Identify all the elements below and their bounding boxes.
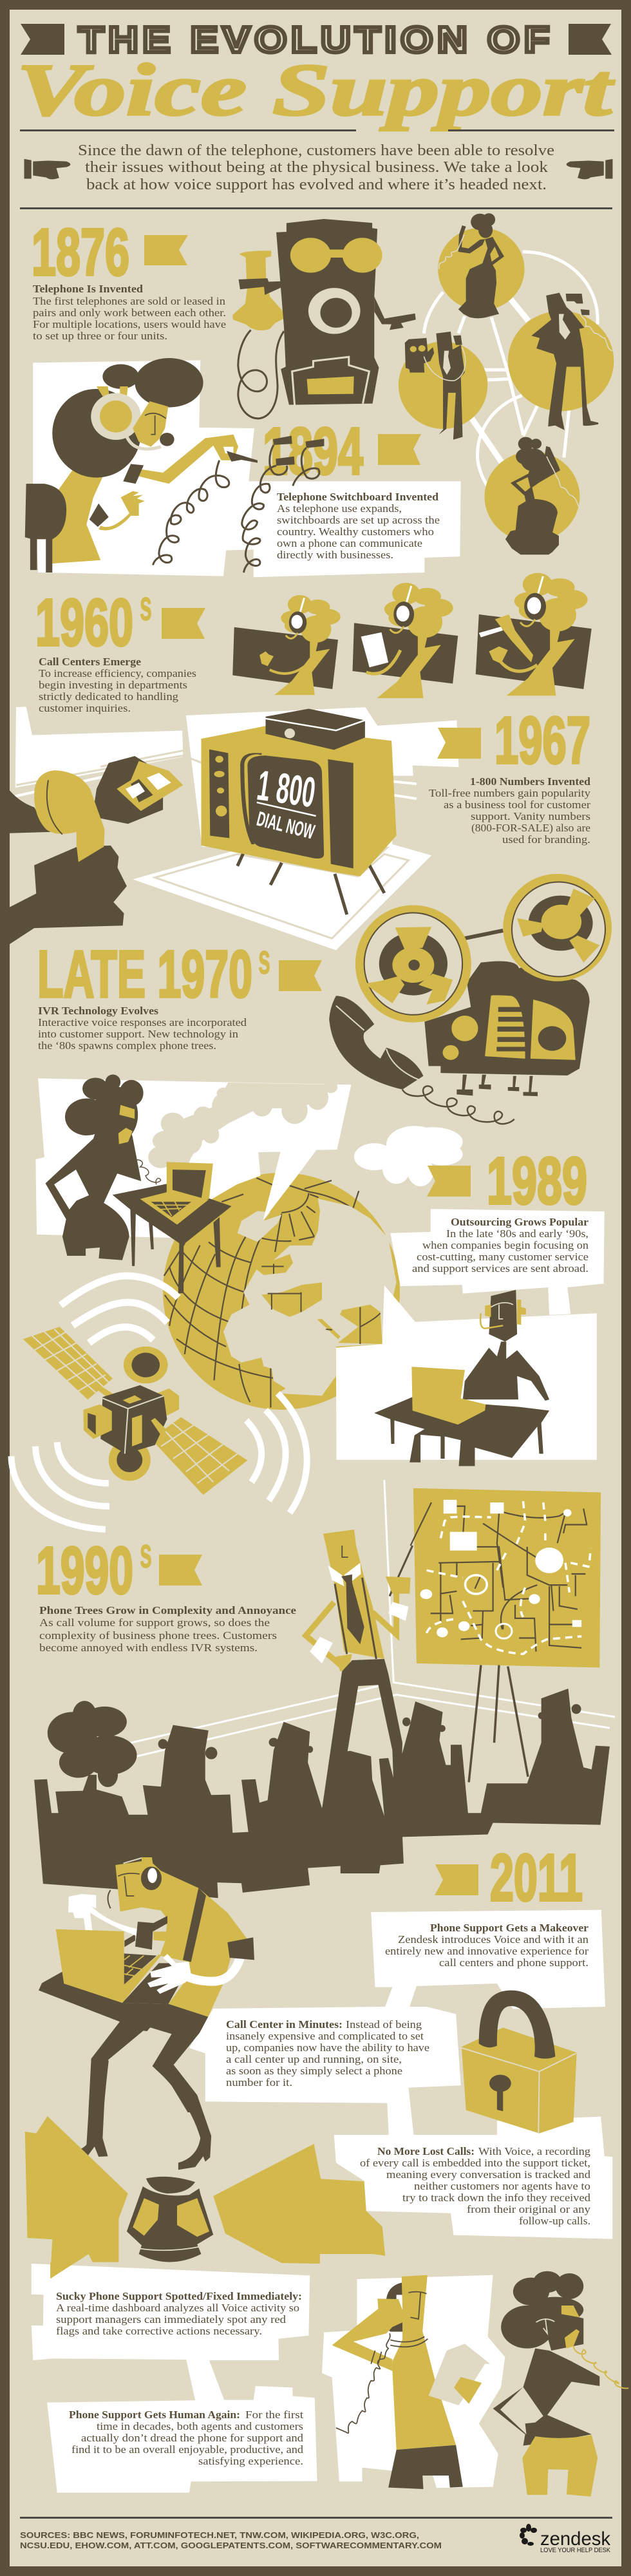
year late 1970s: s [258,935,270,983]
illustration: happy man and woman on phones [322,2271,628,2497]
text: 1-800 numbers invented [429,775,591,846]
text: call centers emerge [39,656,196,714]
phone handset [124,1916,167,1949]
text: call centers emerge: begin investing in departments [39,679,187,691]
agent one [274,595,341,695]
white arm left [68,1894,137,1936]
text: telephone switchboard invented [277,491,440,561]
illustration: switchboard operator [25,358,258,573]
flag 2011 [435,1864,478,1895]
globe disc and grid [163,1173,400,1410]
man caller right [531,293,612,430]
text: outsourcing grows popular: Outsourcing Grows Popular [451,1216,589,1228]
tagline: LOVE YOUR HELP DESK [540,2547,610,2554]
text: call center in minutes: a call center up and running, on site, [226,2053,402,2065]
illustration: megaphone and receiver device [25,2116,385,2278]
flag 1989 [427,1166,471,1197]
year 1990s: 1990 [36,1533,133,1607]
text: no more lost calls: from their original or any [467,2203,591,2215]
panel: 1989 outsourcing [336,1144,605,1466]
text: phone support gets human again: For the first [245,2409,303,2421]
man on phone [332,2275,463,2489]
panel: sucky phone support and human again [32,2254,628,2497]
white panel behind operator [33,360,461,577]
text: telephone is invented [33,283,226,342]
smoke cloud [148,1082,338,1168]
phone tree board [411,1488,601,1782]
intro text: Since the dawn of the telephone, customers have been able to resolve [78,142,554,159]
text: telephone is invented: The first telephones are sold or leased in [33,295,225,307]
text: 1-800 numbers invented: Toll-free numbers gain popularity [429,787,591,799]
white callout panels [336,1209,605,1460]
text: outsourcing grows popular: cost-cutting, many customer service [417,1251,589,1263]
white arm right [147,1937,254,1994]
text: telephone is invented: pairs and only work between each other. [33,307,226,319]
panel: 1990s phone trees [34,1480,615,1898]
text: call center in minutes [226,2018,429,2088]
illustration: callers and web lines [232,213,614,554]
year 1989: 1989 [487,1144,587,1218]
text: ivr technology evolves: IVR Technology Evolves [38,1005,159,1017]
footer sources: NCSU.EDU, EHOW.COM, ATT.COM, GOOGLEPATENTS.COM, SOFTWARECOMMENTARY.COM [20,2541,442,2550]
illustration: tv and room [10,706,458,951]
land masses [223,1198,397,1402]
text: phone trees [39,1604,296,1654]
white speech panel [35,1079,351,1238]
text: makeover: Phone Support Gets a Makeover [430,1922,589,1934]
text: telephone is invented: to set up three or four units. [33,330,167,342]
text: no more lost calls: meaning every conversation is tracked and [386,2168,591,2181]
text: ivr technology evolves: Interactive voice responses are incorporated [38,1016,247,1028]
agent three [506,573,588,696]
illustration: white cloud [354,1126,463,1186]
open laptop [56,1929,161,2003]
text: phone support gets human again: time in decades, both agents and customers [97,2420,303,2432]
year 1876: 1876 [32,215,129,289]
text: sucky phone support: support managers can immediately spot any red [56,2313,287,2325]
screen text dial now: DIAL NOW [254,807,317,844]
zendesk logo [520,2524,611,2554]
text: call centers emerge: To increase efficiency, companies [39,667,196,679]
illustration: three call center agents [232,573,592,698]
signal waves [12,1394,307,1530]
illustration: presenter, board and crowd [34,1480,615,1898]
globe [163,1173,400,1410]
intro text: back at how voice support has evolved and where it’s headed next. [86,176,547,193]
right title banner [569,24,612,55]
arm and hand agent one [259,651,308,674]
satellite body [83,1385,179,1454]
text: call center in minutes: Instead of being [346,2018,422,2031]
flag late 1970s [279,960,322,991]
text: 1-800 numbers invented: (800-FOR-SALE) also are [471,822,590,834]
text: sucky phone support: Sucky Phone Support Spotted/Fixed Immediately: [56,2290,302,2302]
text: call center in minutes: insanely expensive and complicated to set [226,2030,424,2042]
text: makeover: Zendesk introduces Voice and with it an [398,1933,589,1946]
paper and arm agent two [361,632,400,674]
text: no more lost calls: of every call is embedded into the support ticket, [360,2157,590,2169]
text: no more lost calls: No More Lost Calls: [377,2145,475,2157]
text: phone support gets human again: Phone Support Gets Human Again: [69,2409,240,2421]
woman at desk [46,1074,161,1260]
text: phone trees: complexity of business phone trees. Customers [39,1629,277,1642]
panel: 1960s call centers [35,573,592,714]
illustration: man with laptop [39,1857,254,2112]
black handset [329,996,514,1124]
text: ivr technology evolves: the ‘80s spawns complex phone trees. [38,1039,216,1052]
text: sucky phone support: A real-time dashboard analyzes all Voice activity so [56,2302,299,2314]
text: makeover: call centers and phone support. [439,1956,589,1969]
text: telephone switchboard invented: country. Wealthy customers who [277,526,434,538]
title line two: Voice Support [17,49,614,131]
text: telephone is invented: Telephone Is Invented [33,283,143,295]
laptop desk [113,1162,232,1293]
agent two [377,583,453,698]
text: telephone switchboard invented: own a phone can communicate [277,537,422,549]
icon: zendesk petals [520,2524,537,2546]
intro text: their issues without being at the physical business. We take a look [85,159,548,176]
reel two [503,874,612,981]
year 1894: 1894 [263,414,363,488]
icon: pointing hand left [24,159,70,179]
text: telephone is invented: For multiple locations, users would have [33,318,226,330]
text: makeover [385,1922,589,1969]
illustration: satellite [12,1327,307,1530]
man caller left [405,332,466,440]
text: 1-800 numbers invented: 1-800 Numbers Invented [470,775,590,788]
icon: pointing hand right [567,159,613,179]
text: telephone switchboard invented: As telephone use expands, [277,502,402,515]
wordmark: zendesk [540,2528,611,2550]
man torso [115,1857,247,2017]
paper [429,2344,490,2405]
icon: candlestick wall telephone [232,219,416,419]
text: phone trees: As call volume for support grows, so does the [39,1616,270,1629]
text: outsourcing grows popular [412,1216,589,1274]
woman caller lower [505,437,580,554]
crowd silhouettes [34,1689,610,1898]
text: telephone switchboard invented: Telephone Switchboard Invented [277,491,438,503]
white callouts [32,2254,317,2493]
text: ivr technology evolves [38,1005,247,1052]
rug [133,844,431,951]
text: call centers emerge: Call Centers Emerge [39,656,141,668]
year late 1970s: LATE 1970 [37,937,252,1011]
text: phone support gets human again [69,2409,304,2467]
text: no more lost calls: With Voice, a recording [478,2145,590,2157]
dishes [109,1347,168,1481]
handset and arm [10,756,183,944]
screen text 1800: 1 800 [254,761,318,816]
text: makeover: entirely new and innovative experience for [385,1945,589,1957]
title line one: THE EVOLUTION OF [79,19,554,61]
text: phone trees: become annoyed with endless IVR systems. [39,1642,258,1654]
illustration: projector reels and handset [329,874,612,1124]
flag 1990s [159,1555,202,1586]
text: no more lost calls: try to track down the info they received [402,2192,591,2204]
text: call center in minutes: number for it. [226,2076,292,2088]
footer sources: SOURCES: BBC NEWS, FORUMINFOTECH.NET, TNW.COM, WIKIPEDIA.ORG, W3C.ORG, [20,2530,419,2540]
year late 1970s [37,935,270,1011]
panel: 2011 voice [25,1841,612,2278]
illustration: man with laptop [374,1290,549,1466]
text: ivr technology evolves: into customer support. New technology in [38,1028,238,1040]
left title banner [21,24,64,55]
plugs and cords [242,436,324,573]
text: 1-800 numbers invented: used for branding. [502,833,590,846]
text: 1-800 numbers invented: support. Vanity numbers [471,810,590,822]
year 1990s: s [140,1529,152,1577]
year 1960s: 1960 [35,585,133,659]
text: phone support gets human again: actually don’t dread the phone for support and [81,2432,304,2444]
text: sucky phone support: flags and take corrective actions necessary. [56,2325,262,2337]
header [17,19,614,193]
text: no more lost calls: follow-up calls. [519,2215,590,2227]
man trousers [39,1963,208,2112]
text: sucky phone support [56,2290,302,2337]
text: phone support gets human again: find it to be an overall enjoyable, productive, and [71,2443,304,2456]
presenter [306,1530,413,1809]
text: call center in minutes: Call Center in Minutes: [226,2018,343,2031]
text: outsourcing grows popular: and support services are sent abroad. [412,1262,589,1274]
text: no more lost calls: neither customers nor agents have to [414,2180,590,2192]
flag 1894 [378,434,421,465]
text: call center in minutes: as soon as they simply select a phone [226,2065,402,2077]
woman on phone [493,2271,628,2497]
tv set [201,708,397,876]
year 2011: 2011 [490,1841,583,1915]
panel: 1967 1-800 numbers [10,703,591,951]
panel: outsourcing woman [35,1074,351,1293]
upper signal waves [61,1276,178,1343]
panel: 1894 switchboard [25,358,461,577]
text: outsourcing grows popular: when companies begin focusing on [422,1239,589,1251]
footer sources [20,2530,442,2550]
text: call center in minutes: up, companies now have the ability to have [226,2041,429,2054]
intro text [78,142,554,193]
man lower legs [61,2060,211,2170]
woman caller one [439,213,504,318]
white backdrop [322,2275,505,2488]
solar panels [23,1327,247,1495]
year 1960s: s [140,582,152,629]
text: call centers emerge: strictly dedicated to handling [39,690,178,703]
text: telephone switchboard invented: directly with businesses. [277,549,393,561]
text: call centers emerge: customer inquiries. [39,702,131,714]
reel one [355,905,471,1023]
text: telephone switchboard invented: switchboards are set up across the [277,514,440,526]
text: outsourcing grows popular: In the late ‘80s and early ‘90s, [446,1227,589,1240]
text: no more lost calls [360,2145,591,2227]
text: 1-800 numbers invented: as a business tool for customer [444,799,591,811]
white callouts [189,1910,612,2239]
panel: late 1970s ivr [37,874,612,1186]
flag 1876 [144,235,188,265]
panel: 1876 telephone invented [32,213,614,554]
icon: padlock [462,1991,577,2134]
text: phone trees: Phone Trees Grow in Complexity and Annoyance [39,1604,296,1616]
flag 1967 [437,728,481,759]
projector body [424,961,590,1096]
text: phone support gets human again: satisfying experience. [198,2455,303,2467]
arm and cigarette agent three [479,614,537,671]
flag 1960s [162,608,205,639]
